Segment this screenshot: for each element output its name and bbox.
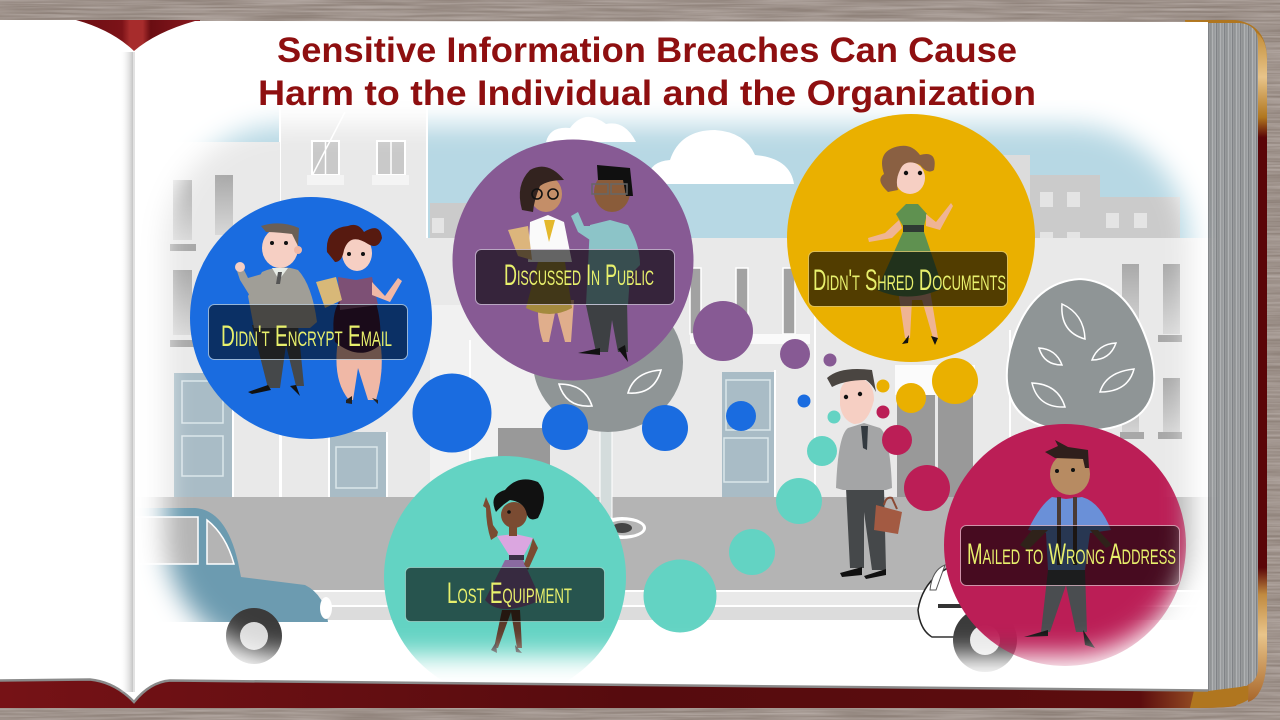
people: man and woman xyxy=(235,223,402,404)
pavement xyxy=(315,592,1179,620)
person: man with suspenders xyxy=(1020,440,1112,648)
left pillars xyxy=(173,175,1180,438)
thought bubbles: purple xyxy=(693,301,836,369)
label box xyxy=(406,568,604,622)
panel: lost equipment xyxy=(384,456,626,698)
label box xyxy=(476,250,674,304)
page stack xyxy=(1208,23,1258,691)
person: woman in pink dress xyxy=(483,479,544,653)
tall building xyxy=(279,110,428,238)
tree: centre xyxy=(534,328,683,539)
panel: didn't shred documents xyxy=(787,114,1035,362)
title: Sensitive Information Breaches Can Cause xyxy=(277,31,1017,70)
label text: Discussed In Public xyxy=(504,259,654,292)
people: two colleagues xyxy=(508,165,640,362)
title: Harm to the Individual and the Organization xyxy=(258,74,1036,113)
grey blocks xyxy=(498,395,973,498)
left car xyxy=(130,508,332,664)
label text: Lost Equipment xyxy=(447,577,572,610)
street scene xyxy=(130,100,1230,672)
grey shopfront windows xyxy=(690,268,795,334)
panel: discussed in public xyxy=(452,140,694,380)
label box xyxy=(960,526,1180,586)
tree: right xyxy=(1007,279,1154,431)
person: woman in green dress xyxy=(868,146,953,345)
title xyxy=(258,31,1036,113)
street-level facade xyxy=(282,238,1202,497)
label box xyxy=(208,304,408,360)
upper windows xyxy=(312,141,405,175)
panel: mailed to wrong address xyxy=(944,424,1186,666)
clouds xyxy=(546,117,794,184)
thought bubbles: crimson xyxy=(876,406,950,511)
right car xyxy=(918,557,1017,672)
sky xyxy=(200,110,1204,238)
thought bubbles: teal xyxy=(644,410,840,632)
thought bubbles: blue xyxy=(412,374,810,452)
background buildings xyxy=(430,175,1180,238)
label box xyxy=(808,252,1008,306)
central worried man xyxy=(827,369,902,579)
road xyxy=(130,497,1230,590)
label text: Didn't Shred Documents xyxy=(813,264,1006,297)
thought bubbles: yellow xyxy=(876,358,978,413)
label text: Didn't Encrypt Email xyxy=(221,320,392,353)
panel: didn't encrypt email xyxy=(190,197,432,439)
doors xyxy=(174,372,776,498)
